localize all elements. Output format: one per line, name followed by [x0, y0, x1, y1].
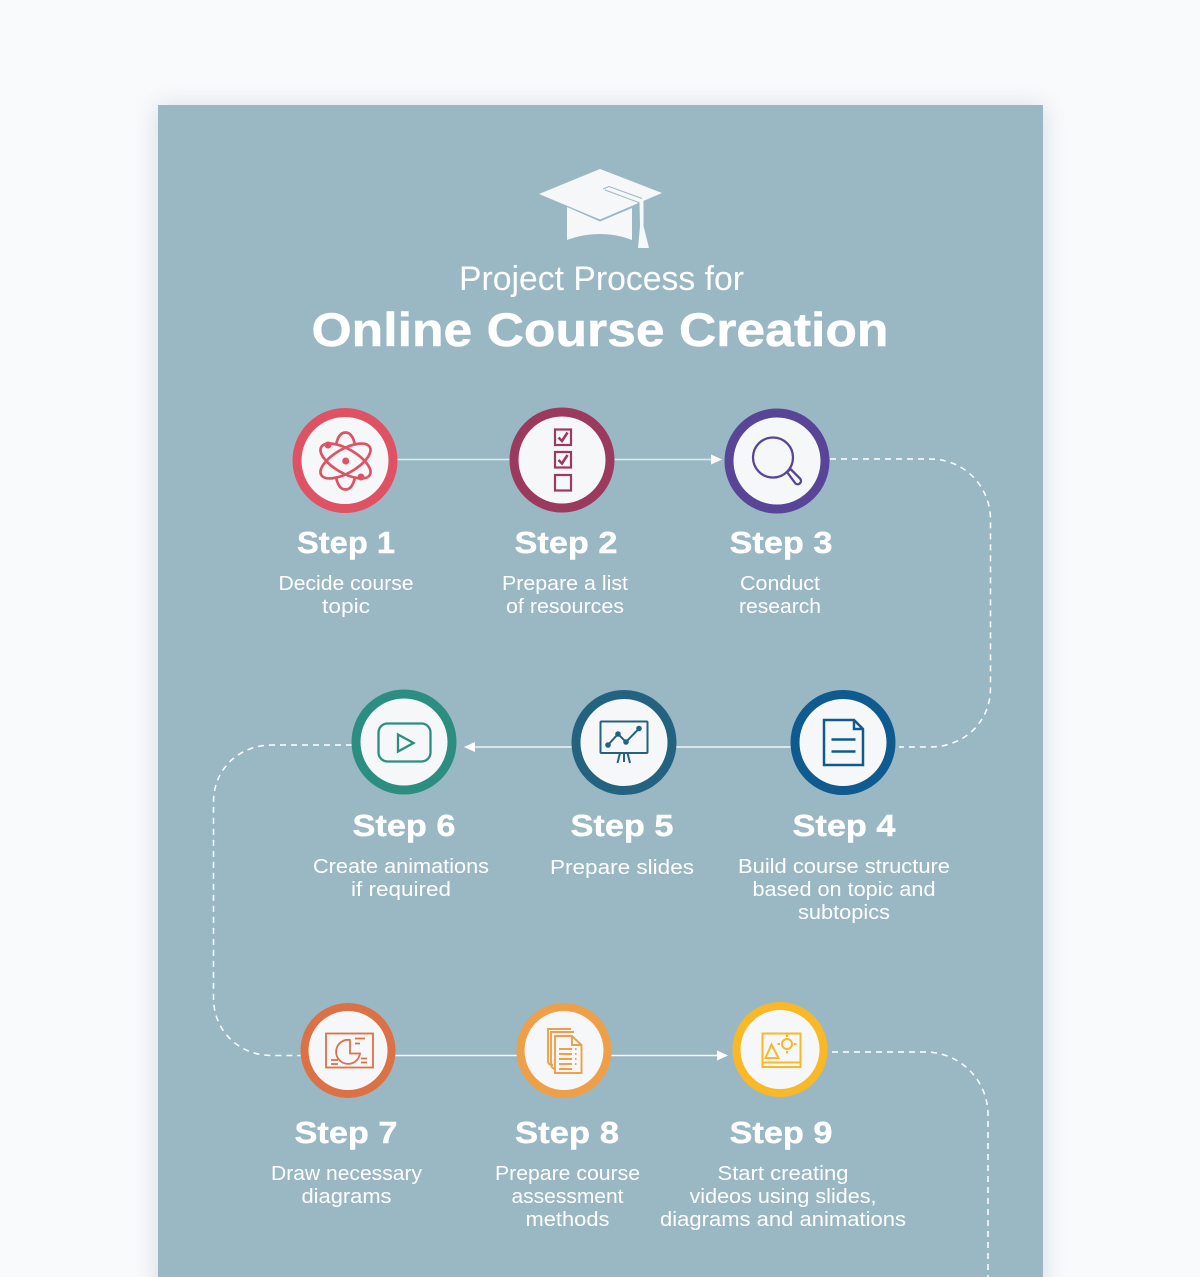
- step 8 label: Step 8: [515, 1115, 619, 1150]
- step 8 description: [495, 1163, 640, 1231]
- step 8 description: methods: [526, 1209, 610, 1231]
- step 5 description: Prepare slides: [550, 857, 694, 879]
- icon: video play: [356, 694, 452, 790]
- title: [312, 260, 888, 356]
- icon: pie chart slide: [304, 1007, 392, 1094]
- step 2 description: of resources: [506, 596, 624, 618]
- step 5 label: Step 5: [570, 808, 674, 843]
- step 4 description: [738, 856, 950, 924]
- step 4 description: based on topic and: [752, 879, 936, 901]
- title line 1: Project Process for: [459, 260, 744, 298]
- step 6: [313, 694, 489, 901]
- step 9 description: [660, 1163, 906, 1231]
- step 7 description: diagrams: [302, 1186, 392, 1208]
- icon: magnifier: [729, 413, 825, 509]
- icon: document: [795, 694, 891, 790]
- step 9 label: Step 9: [730, 1115, 832, 1150]
- step 2 description: Prepare a list: [502, 573, 628, 595]
- step 9: [660, 1006, 906, 1231]
- step 3 description: Conduct: [740, 573, 820, 595]
- step 8 description: assessment: [512, 1186, 624, 1208]
- icon: checklist: [514, 412, 610, 508]
- step 2 label: Step 2: [514, 525, 618, 560]
- step 7 description: Draw necessary: [271, 1163, 422, 1185]
- step 6 label: Step 6: [352, 808, 456, 843]
- step 7 label: Step 7: [294, 1115, 398, 1150]
- panel: poster background: [156, 105, 1045, 1277]
- step 8: [495, 1007, 640, 1231]
- step 3 label: Step 3: [730, 525, 832, 560]
- step 7: [271, 1007, 422, 1208]
- step 4: [738, 694, 950, 924]
- step 9 description: diagrams and animations: [660, 1209, 906, 1231]
- connector: step 6 to step 7 dashed: [214, 745, 352, 1056]
- step 9 description: Start creating: [718, 1163, 848, 1185]
- icon: stacked documents: [520, 1007, 608, 1094]
- step 6 description: if required: [351, 879, 451, 901]
- step 3 description: [739, 573, 821, 618]
- step 9 description: videos using slides,: [690, 1186, 876, 1208]
- step 1 label: Step 1: [297, 525, 395, 560]
- step 4 description: Build course structure: [738, 856, 950, 878]
- step 1 description: Decide course: [278, 573, 414, 595]
- connector: step 3 to step 4 dashed: [830, 459, 990, 747]
- connector: step 9 onward dashed: [832, 1052, 988, 1277]
- connector: step 4 to step 6: [464, 742, 792, 752]
- step 4 description: subtopics: [798, 902, 890, 924]
- step 3 description: research: [739, 596, 821, 618]
- connector: step 7 to step 9: [394, 1050, 728, 1060]
- step 5: [550, 694, 694, 879]
- connector: step 1 to step 3: [396, 454, 722, 464]
- step 1: [278, 412, 414, 618]
- step 1 description: [278, 573, 414, 618]
- step 8 description: Prepare course: [495, 1163, 640, 1185]
- step 4 label: Step 4: [792, 808, 896, 843]
- step 6 description: [313, 856, 489, 901]
- step 3: [729, 413, 832, 618]
- icon: presentation chart: [576, 694, 672, 790]
- step 2 description: [502, 573, 628, 618]
- step 7 description: [271, 1163, 422, 1208]
- step 6 description: Create animations: [313, 856, 489, 878]
- step 2: [502, 412, 628, 618]
- title line 2: Online Course Creation: [312, 303, 888, 356]
- icon: image with sun and mountain: [736, 1006, 824, 1093]
- icon: atom: [297, 412, 393, 508]
- icon: graduation cap: [539, 169, 662, 248]
- step 1 description: topic: [322, 596, 370, 618]
